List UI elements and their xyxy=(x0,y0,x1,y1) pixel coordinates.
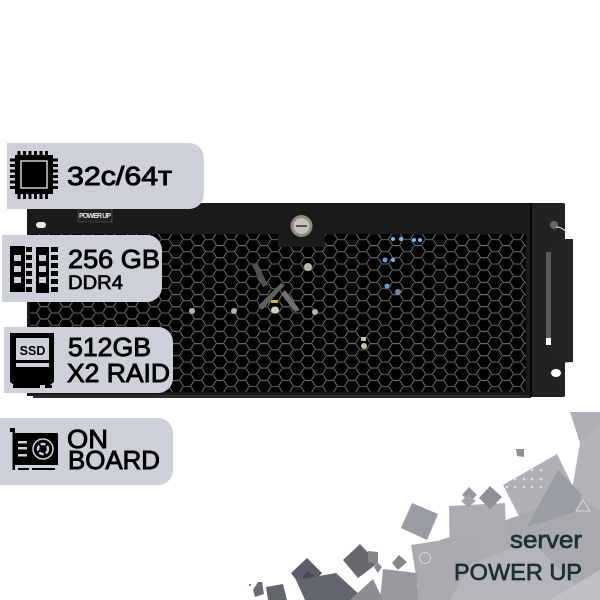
icon: graphics card xyxy=(10,428,58,470)
chassis front panel xyxy=(27,203,531,396)
lock plate xyxy=(27,203,531,247)
text: raid: X2 RAID xyxy=(67,360,170,388)
label: SSD xyxy=(4,327,173,393)
text: on: ON xyxy=(67,426,108,454)
icon: CPU chip xyxy=(10,151,58,199)
caption: server POWER UP: POWER UP xyxy=(454,559,582,585)
label: onboard graphics xyxy=(0,418,173,485)
text: board: BOARD xyxy=(68,447,160,475)
handle xyxy=(552,239,573,363)
text: cores and threads: 32с/64т xyxy=(67,163,172,191)
label: CPU xyxy=(7,143,204,209)
caption: server POWER UP xyxy=(454,527,582,585)
lock xyxy=(290,215,312,237)
logo badge xyxy=(78,209,112,222)
right rack ear xyxy=(530,203,573,397)
caption: server POWER UP: server xyxy=(510,527,582,554)
server chassis xyxy=(27,203,573,398)
logo badge: POWER UP xyxy=(79,213,111,220)
dot grid xyxy=(506,469,542,488)
text: memory size: 256 GB xyxy=(68,244,160,274)
icon: triangle outline xyxy=(576,500,590,511)
icon: SSD drive: SSD xyxy=(20,344,45,358)
decorative polygons: bottom right xyxy=(249,412,600,600)
text: memory type: DDR4 xyxy=(68,273,123,294)
mount hole left xyxy=(36,222,46,228)
fan and interior highlights xyxy=(189,237,422,349)
icon: RAM modules xyxy=(10,246,58,293)
label: RAM xyxy=(2,235,162,302)
text: storage size: 512GB xyxy=(68,334,151,362)
icon: SSD drive xyxy=(10,333,54,388)
icon: circle outline xyxy=(420,552,430,564)
hexagonal mesh xyxy=(30,234,527,392)
